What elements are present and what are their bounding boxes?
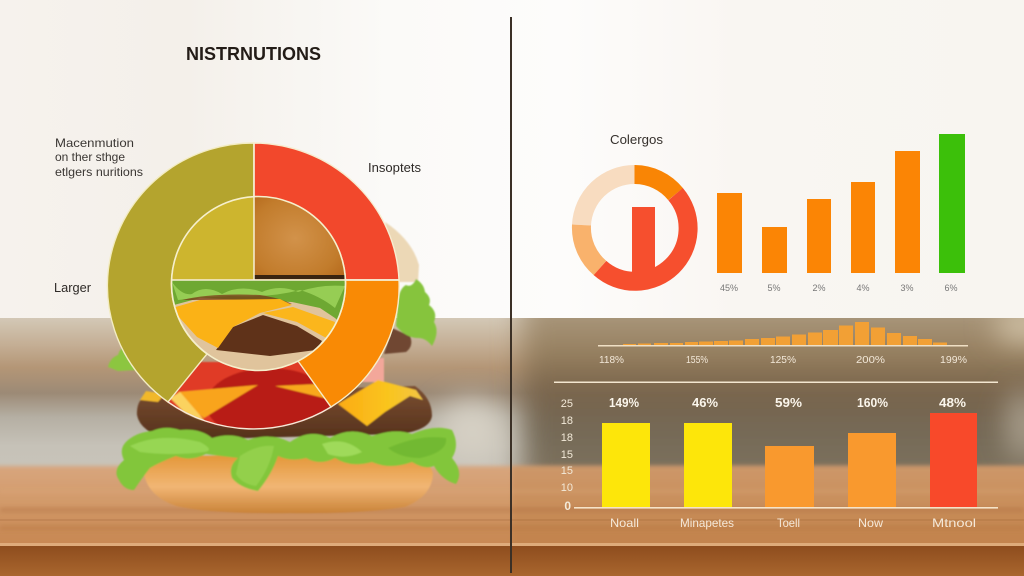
donut chart xyxy=(581,174,688,281)
y axis labels: 15 xyxy=(561,465,573,477)
bar chart: top right: 2% xyxy=(812,283,826,293)
burger illustration xyxy=(108,222,459,513)
value labels: 48% xyxy=(939,395,966,410)
y axis labels: 15 xyxy=(561,449,573,461)
bottom bun xyxy=(144,454,433,513)
tomato sliver xyxy=(362,358,384,382)
vertical divider xyxy=(510,17,512,573)
histogram: 118% xyxy=(599,355,624,366)
text block: macronutrition note: Macenmution xyxy=(55,136,134,150)
histogram: 125% xyxy=(770,355,796,366)
bar chart: top right: 4% xyxy=(856,283,870,293)
ring outlines xyxy=(168,402,331,429)
value labels: 46% xyxy=(692,395,718,410)
inner quadrant: olive xyxy=(172,197,254,280)
y axis labels: 10 xyxy=(561,482,573,494)
lettuce lower xyxy=(116,428,459,491)
bar chart: bottom right xyxy=(561,395,998,530)
donut centre bar xyxy=(632,207,655,274)
segment: olive xyxy=(107,143,254,402)
segment: red xyxy=(254,143,399,280)
text block: macronutrition note xyxy=(55,136,143,179)
inner lower: burger cross section xyxy=(170,275,348,372)
y axis labels: 18 xyxy=(561,432,573,444)
category labels: Minapetes xyxy=(680,516,734,530)
bar chart: top right: 45% xyxy=(720,283,738,293)
bar chart: top right: 3% xyxy=(900,283,914,293)
inner quadrant: bun xyxy=(254,197,346,280)
donut segment: pale peach xyxy=(582,174,634,225)
donut segment: light orange xyxy=(581,225,600,268)
nutrition ring chart xyxy=(107,143,399,429)
value labels xyxy=(609,395,966,410)
histogram xyxy=(598,322,968,366)
patty right xyxy=(384,328,411,354)
text block: macronutrition note: on ther sthge xyxy=(55,150,125,164)
lettuce left xyxy=(108,346,138,371)
category labels: Mtnool xyxy=(932,516,976,530)
category labels: Toell xyxy=(777,516,800,530)
category labels: Noall xyxy=(610,516,639,530)
category labels: Now xyxy=(858,516,883,530)
segment: orange xyxy=(298,280,399,407)
tomato and cheese seen in lower gap xyxy=(160,361,338,430)
donut segment: orange xyxy=(634,174,676,194)
label: categories: Colergos xyxy=(610,133,663,147)
y axis labels xyxy=(561,398,573,513)
histogram: 199% xyxy=(940,355,967,366)
category labels xyxy=(610,516,976,530)
label: insoptets: Insoptets xyxy=(368,161,421,175)
value labels: 59% xyxy=(775,395,802,410)
lettuce highlights xyxy=(130,438,209,454)
bar chart: top right: 5% xyxy=(767,283,781,293)
donut segment: red xyxy=(600,194,688,281)
y axis labels: 25 xyxy=(561,398,573,410)
title: NISTRNUTIONS xyxy=(186,44,321,64)
value labels: 149% xyxy=(609,395,639,410)
top bun behind ring xyxy=(385,222,419,282)
cheese left edge xyxy=(140,391,165,402)
y axis labels: 0 xyxy=(564,499,571,513)
cheese right xyxy=(338,380,423,426)
bar chart: top right xyxy=(717,134,965,293)
histogram: 155% xyxy=(686,355,708,366)
bar chart: top right: 6% xyxy=(944,283,958,293)
horizontal divider xyxy=(554,382,998,383)
label: larger: Larger xyxy=(54,281,91,295)
lettuce right xyxy=(396,279,437,346)
text block: macronutrition note: etlgers nuritions xyxy=(55,165,143,179)
y axis labels: 18 xyxy=(561,415,573,427)
patty lower xyxy=(137,386,432,440)
histogram: 200% xyxy=(856,355,885,366)
value labels: 160% xyxy=(857,395,888,410)
